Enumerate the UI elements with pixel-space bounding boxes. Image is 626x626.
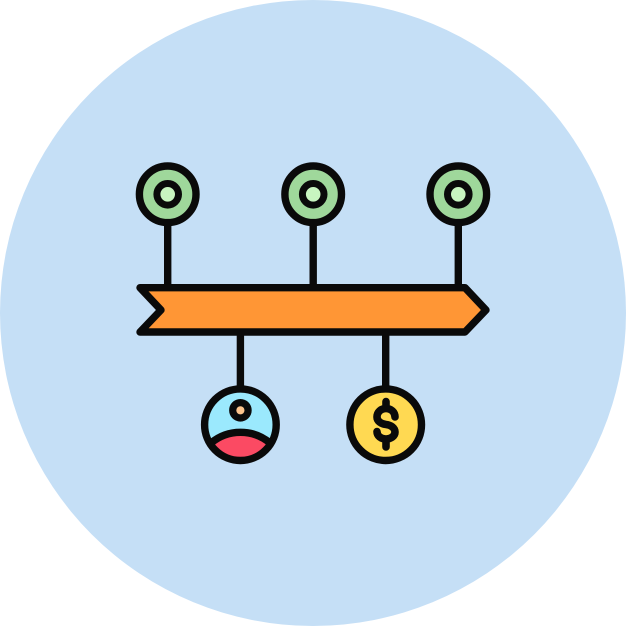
milestone 2: target with stem <box>285 166 342 287</box>
timeline icon <box>139 166 487 461</box>
milestone 1: target with stem <box>139 166 196 287</box>
milestone 3: target with stem <box>430 166 487 287</box>
person node with stem <box>205 335 276 461</box>
dollar coin node with stem <box>350 335 422 461</box>
arrow banner <box>140 288 486 332</box>
